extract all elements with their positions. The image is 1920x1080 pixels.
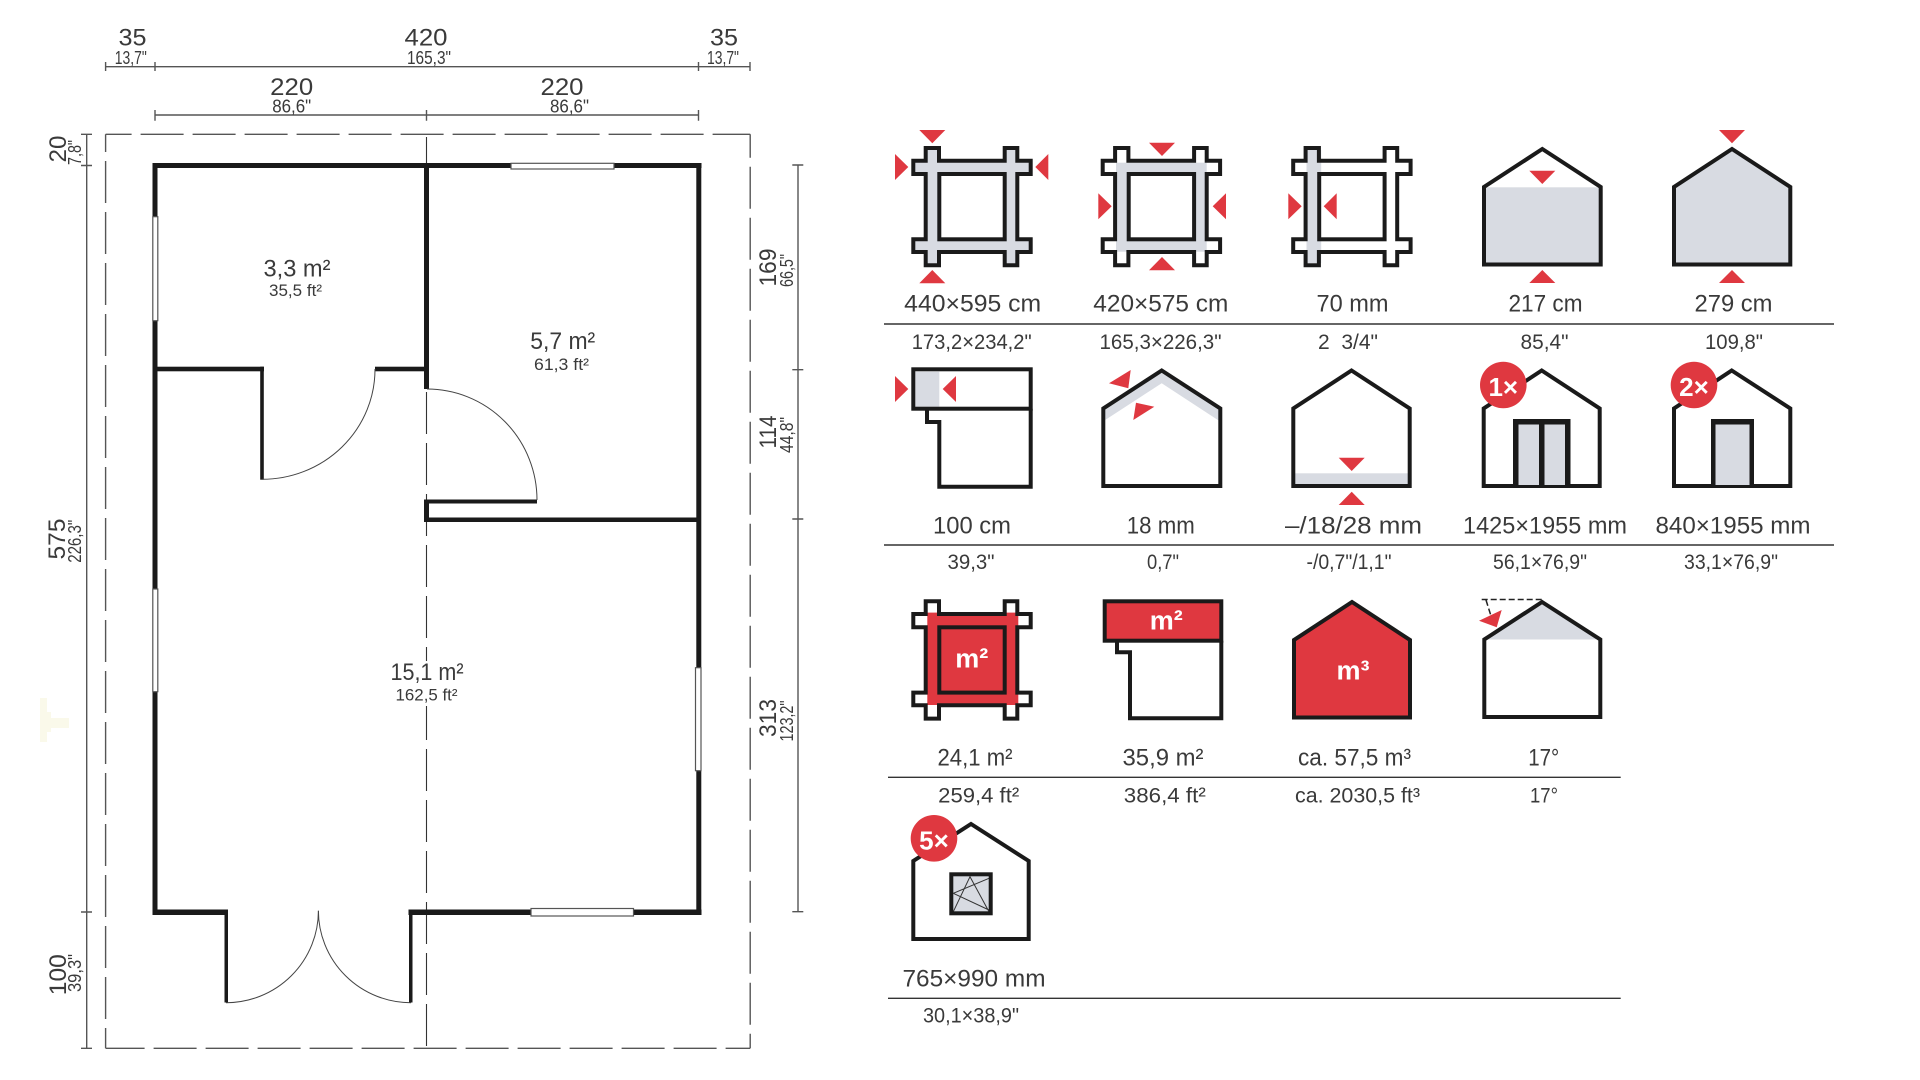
icon: interior floor area m2: m²: [955, 644, 988, 674]
spec: 217 cm: 85,4": [1520, 331, 1568, 354]
icon: double door 1x: [1480, 362, 1600, 488]
spec: 840x1955 mm: 840×1955 mm: [1656, 512, 1810, 539]
left vertical dimensions: 39,3": [64, 954, 85, 992]
room label: 15,1 m2: 162,5 ft²: [396, 686, 458, 705]
spec: 1425x1955 mm: 1425×1955 mm: [1463, 512, 1627, 539]
horizontal dimension: room widths: 86,6": [272, 95, 311, 116]
spec: 217 cm: [1508, 291, 1582, 354]
icon: roof area m2: [1105, 601, 1221, 718]
right vertical dimensions: 66,5": [776, 254, 797, 287]
room label: 5,7 m2: 5,7 m²: [530, 328, 595, 355]
horizontal dimension: total widths: 165,3": [407, 47, 451, 68]
spec: 420x575 cm: [1093, 291, 1228, 354]
room label: 5,7 m2: [530, 328, 595, 374]
spec: 35,9 m2: 35,9 m²: [1122, 745, 1204, 772]
icon: side wall height: [1484, 149, 1601, 283]
spec: ca. 57,5 m3: ca. 2030,5 ft³: [1295, 785, 1420, 808]
icon: wall footprint 420x575: [1098, 143, 1226, 270]
divider lines: [884, 324, 1834, 998]
room label: 5,7 m2: 61,3 ft²: [534, 355, 589, 374]
spec: 35,9 m2: 386,4 ft²: [1124, 785, 1206, 808]
spec: 70 mm: 2 3/4": [1318, 331, 1378, 354]
horizontal dimension: room widths: 220: [270, 74, 313, 101]
right vertical dimensions: 114: [755, 416, 782, 448]
spec: 1425x1955 mm: 56,1×76,9": [1493, 551, 1587, 574]
scan artifact: [40, 698, 69, 742]
horizontal dimension: total widths: 13,7": [707, 47, 739, 68]
spec: 279 cm: 109,8": [1705, 331, 1763, 354]
spec: ca. 57,5 m3: [1295, 745, 1420, 808]
spec: 440x595 cm: [904, 291, 1041, 354]
horizontal dimension: room widths: 86,6": [550, 95, 589, 116]
spec: ca. 57,5 m3: ca. 57,5 m³: [1298, 745, 1411, 772]
windows: [153, 163, 701, 916]
icon: wall thickness: [1288, 148, 1411, 265]
left vertical dimensions: 226,3": [64, 520, 85, 563]
icon: outer footprint 440x595: [895, 130, 1048, 283]
left vertical dimensions: [44, 134, 92, 1048]
walls: [152, 163, 702, 1002]
horizontal dimension: total widths: 420: [404, 25, 448, 52]
spec: -/18/28 mm: [1285, 512, 1422, 574]
left vertical dimensions: 575: [44, 518, 71, 560]
spec: 35,9 m2: [1122, 745, 1206, 808]
right vertical dimensions: 169: [755, 248, 782, 286]
spec: 17 degrees: 17°: [1528, 745, 1559, 772]
specification rows: [884, 130, 1834, 1027]
horizontal dimension: total widths: 35: [118, 25, 146, 52]
spec: 70 mm: 70 mm: [1316, 291, 1388, 318]
icon: ridge height: [1674, 130, 1790, 283]
icon: window 5x: 5×: [919, 825, 949, 855]
spec: 279 cm: [1694, 291, 1772, 354]
spec: 765x990 mm: 765×990 mm: [902, 966, 1046, 993]
room label: 3,3 m2: 3,3 m²: [264, 256, 331, 283]
room label: 3,3 m2: [264, 256, 331, 300]
icon: roof thickness: [1103, 370, 1220, 486]
icon: single door 2x: [1671, 362, 1790, 488]
room label: 3,3 m2: 35,5 ft²: [269, 281, 322, 300]
spec: 420x575 cm: 420×575 cm: [1093, 291, 1228, 318]
icon: volume m3: m³: [1336, 655, 1370, 685]
spec: 70 mm: [1316, 291, 1388, 354]
room label: 15,1 m2: [388, 659, 466, 706]
spec: 840x1955 mm: 33,1×76,9": [1684, 551, 1778, 574]
spec: 100 cm: 100 cm: [933, 512, 1011, 539]
spec: 24,1 m2: 259,4 ft²: [938, 785, 1019, 808]
horizontal dimension: room widths: 220: [540, 74, 584, 101]
icon: single door 2x: 2×: [1679, 372, 1709, 402]
icon: floor thickness: [1293, 370, 1410, 505]
icon: roof area m2: m²: [1150, 605, 1183, 635]
right vertical dimensions: [755, 165, 803, 912]
icon: double door 1x: 1×: [1488, 372, 1518, 402]
icon: interior floor area m2: [913, 601, 1031, 719]
icon: roof overhang: [895, 369, 1031, 487]
spec: 217 cm: 217 cm: [1508, 291, 1582, 318]
spec: 100 cm: 39,3": [948, 551, 994, 574]
spec: 17 degrees: 17°: [1530, 785, 1558, 808]
roof overhang outline: [106, 134, 750, 1048]
spec: 17 degrees: [1528, 745, 1559, 808]
door swings: [226, 369, 537, 1003]
spec: 765x990 mm: 30,1×38,9": [923, 1004, 1019, 1027]
spec: 765x990 mm: [902, 966, 1046, 1027]
icon: roof angle: [1479, 600, 1600, 717]
spec: -/18/28 mm: -/0,7"/1,1": [1306, 551, 1392, 574]
horizontal dimension: total widths: 35: [710, 25, 738, 52]
spec: 24,1 m2: 24,1 m²: [938, 745, 1012, 772]
spec: 279 cm: 279 cm: [1694, 291, 1772, 318]
right vertical dimensions: 123,2": [776, 700, 797, 742]
right vertical dimensions: 44,8": [776, 417, 797, 453]
right vertical dimensions: 313: [755, 699, 782, 737]
spec: 840x1955 mm: [1656, 512, 1810, 574]
spec: 440x595 cm: 173,2×234,2": [912, 331, 1032, 354]
spec: 18 mm: 18 mm: [1127, 512, 1195, 539]
room label: 15,1 m2: 15,1 m²: [390, 659, 464, 686]
spec: 18 mm: 0,7": [1147, 551, 1179, 574]
left vertical dimensions: 20: [45, 136, 72, 162]
left vertical dimensions: 7,8": [64, 140, 85, 165]
horizontal dimension: room widths: [155, 74, 698, 121]
spec: 24,1 m2: [938, 745, 1019, 808]
horizontal dimension: total widths: 13,7": [115, 47, 147, 68]
spec: 100 cm: [933, 512, 1011, 574]
spec: 18 mm: [1127, 512, 1195, 574]
floor plan: [44, 25, 803, 1048]
spec: -/18/28 mm: –/18/28 mm: [1285, 512, 1422, 539]
spec: 1425x1955 mm: [1463, 512, 1627, 574]
icon: volume m3: [1294, 602, 1410, 718]
left vertical dimensions: 100: [45, 954, 72, 995]
horizontal dimension: total widths: [106, 25, 750, 71]
icon: window 5x: [911, 815, 1029, 939]
spec: 440x595 cm: 440×595 cm: [904, 291, 1041, 318]
spec: 420x575 cm: 165,3×226,3": [1100, 331, 1222, 354]
